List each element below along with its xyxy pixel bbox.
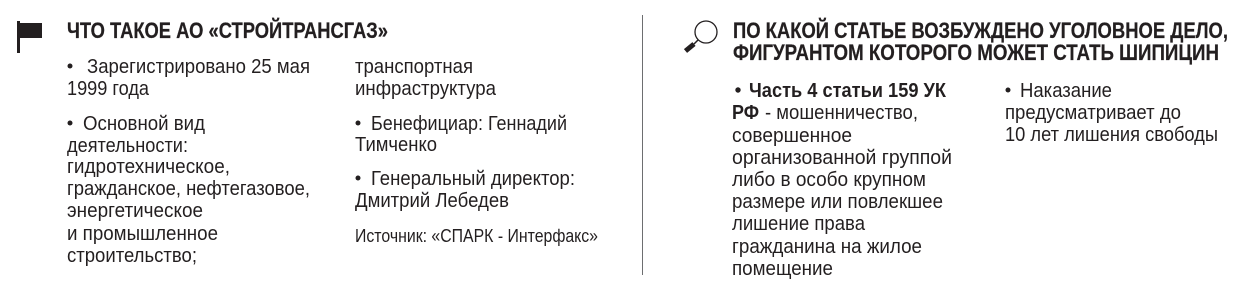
heading: criminal case article <box>733 18 1228 65</box>
text column 2: инфраструктура <box>355 77 497 100</box>
text column: punishment: 10 лет лишения свободы <box>1005 123 1218 146</box>
panel: criminal case article <box>686 18 1228 280</box>
text column: punishment <box>1005 79 1218 146</box>
text column: article description: совершенное <box>732 124 852 147</box>
text column 1: гидротехническое, <box>67 155 230 178</box>
text column: article description: организованной группой <box>732 146 952 169</box>
text column 1: энергетическое <box>67 199 203 222</box>
text column 2: Тимченко <box>355 133 437 156</box>
text column 1: 1999 года <box>67 77 150 100</box>
text column: article description: помещение <box>732 257 833 280</box>
icon: flag <box>17 21 42 53</box>
text column: punishment: предусматривает до <box>1005 101 1181 124</box>
text column 1 <box>67 55 310 267</box>
text column 2 <box>355 55 575 212</box>
text column: article description: - мошенничество, <box>765 101 918 124</box>
text column: article description: либо в особо крупном <box>732 168 926 191</box>
text column: article description: лишение права <box>732 212 866 235</box>
text column 1: деятельности: <box>67 134 188 157</box>
text column 2: Дмитрий Лебедев <box>355 189 509 212</box>
text column 2: Генеральный директор: <box>371 167 575 190</box>
text column 2: Бенефициар: Геннадий <box>371 112 567 135</box>
text column 1: строительство; <box>67 244 197 267</box>
text column: article description <box>732 79 952 280</box>
text column 2: транспортная <box>355 55 473 78</box>
text column: article description: размере или повлекшее <box>732 190 943 213</box>
heading: what is Stroytransgaz: ЧТО ТАКОЕ АО «СТРОЙТРАНСГАЗ» <box>67 18 388 43</box>
panel: what is Stroytransgaz <box>17 18 598 267</box>
text column: punishment: Наказание <box>1020 79 1112 102</box>
source note: Источник: «СПАРК - Интерфакс» <box>355 226 598 246</box>
text column 1: Зарегистрировано 25 мая <box>87 55 310 78</box>
text column 1: и промышленное <box>67 222 218 245</box>
text column 1: Основной вид <box>83 112 205 135</box>
text column: article description: Часть 4 статьи 159 УК <box>749 79 946 102</box>
text column 1: гражданское, нефтегазовое, <box>67 177 310 200</box>
text column: article description: гражданина на жилое <box>732 235 922 258</box>
icon: magnifying glass <box>686 21 717 51</box>
text column: article description: РФ <box>732 101 759 124</box>
